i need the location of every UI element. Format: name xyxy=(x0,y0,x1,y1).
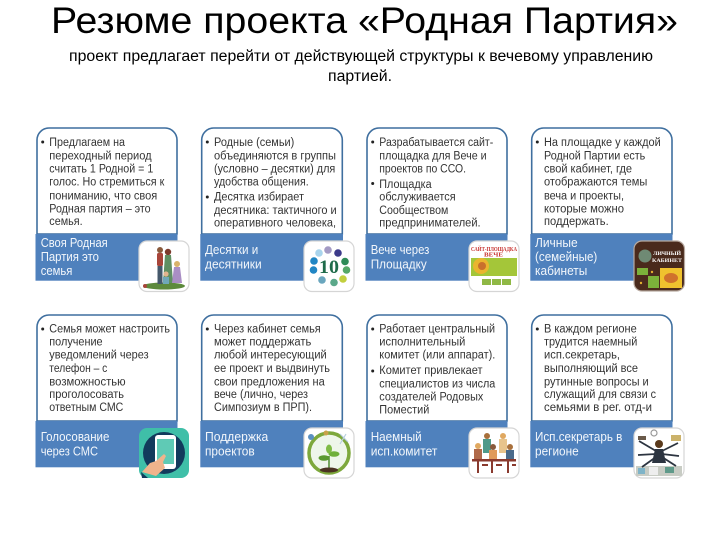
icon: team at table xyxy=(469,428,519,478)
text: card 1 body: пониманию, что своя xyxy=(49,190,157,202)
heading: card 5: через СМС xyxy=(41,444,98,458)
text: card 2 body: оперативного человека, xyxy=(214,218,336,230)
panel: Исп.секретарь в регионе xyxy=(530,315,684,478)
heading: card 8: регионе xyxy=(535,444,579,458)
text: card 5 body: ответным СМС xyxy=(49,402,123,414)
text: card 7 body: Работает центральный xyxy=(379,324,495,336)
text: card 1 body: Родная партия – это xyxy=(49,204,151,216)
text: card 1 body: Предлагаем на xyxy=(49,137,126,149)
text: card 6 body: свои предложения на xyxy=(214,376,325,388)
text: card 4 body xyxy=(544,137,661,228)
text: card 4 body: отображаются темы xyxy=(544,176,647,188)
text: card 1 body: переходный период xyxy=(49,150,152,162)
text: card 8 body: В каждом регионе xyxy=(544,324,637,336)
heading: card 4: Личные xyxy=(535,235,578,250)
text: card 5 body xyxy=(49,324,170,414)
text: card 1 body: семья. xyxy=(49,216,83,228)
text: card 8 body: семьями в рег. отд-и xyxy=(544,402,652,414)
panel: Своя Родная Партия xyxy=(36,128,189,292)
heading: card 8 xyxy=(535,429,622,458)
subtitle xyxy=(69,48,653,85)
text: card 4 body: На площадке у каждой xyxy=(544,137,661,149)
text: card 7 body: комитет (или аппарат). xyxy=(379,350,495,362)
text: card 3 body xyxy=(379,137,493,230)
text: card 3 body: проектов по ССО. xyxy=(379,164,466,176)
panel: Наемный исп.комитет xyxy=(366,315,519,478)
text: card 4 body: которые можно xyxy=(544,204,624,216)
heading: card 1: семья xyxy=(41,263,72,278)
panel: Поддержка проектов xyxy=(200,315,354,478)
heading: card 4 xyxy=(535,235,597,278)
icon: personal cabinet: КАБИНЕТ xyxy=(652,258,682,264)
text: card 1 body xyxy=(49,137,165,228)
subtitle: проект предлагает перейти от действующей структуры к вечевому управлению xyxy=(69,48,653,65)
heading: card 1: Партия это xyxy=(41,249,99,264)
icon: personal cabinet: ЛИЧНЫЙ xyxy=(653,249,682,257)
heading: card 7: исп.комитет xyxy=(371,444,437,458)
text: card 6 body xyxy=(214,324,330,414)
text: card 8 body: рутинные вопросы и xyxy=(544,376,649,388)
text: card 5 body: телефон – с xyxy=(49,363,108,375)
text: card 2 body: Родные (семьи) xyxy=(214,137,294,149)
text: card 2 body: (условно – десятки) для xyxy=(214,164,335,176)
text: card 2 body: удобства общения. xyxy=(214,176,309,188)
text: card 3 body: площадка для Вече и xyxy=(379,150,487,162)
icon: site: САЙТ-ПЛОЩАДКА xyxy=(471,245,517,253)
subtitle: партией. xyxy=(328,68,392,85)
text: card 6 body: может поддержать xyxy=(214,336,311,348)
icon: personal cabinet xyxy=(634,241,684,291)
title: Резюме проекта «Родная Партия» xyxy=(51,0,678,41)
text: card 8 body: выполняющий все xyxy=(544,363,638,375)
text: card 6 body: Через кабинет семья xyxy=(214,324,321,336)
heading: card 5 xyxy=(41,429,109,458)
text: card 5 body: возможностью xyxy=(49,376,126,388)
text: card 7 body xyxy=(379,324,496,416)
text: card 7 body: исполнительный xyxy=(379,336,465,348)
text: card 2 body: объединяются в группы xyxy=(214,150,336,162)
heading: card 7: Наемный xyxy=(371,429,422,444)
heading: card 4: (семейные) xyxy=(535,249,597,264)
heading: card 8: Исп.секретарь в xyxy=(535,429,622,444)
icon: family xyxy=(139,241,189,292)
heading: card 2: десятники xyxy=(205,257,262,272)
text: card 8 body: служащий для связи с xyxy=(544,389,656,401)
text: card 5 body: проголосовать xyxy=(49,389,124,401)
panel: Личные кабинеты xyxy=(530,128,684,291)
text: card 3 body: предпринимателей. xyxy=(379,218,481,230)
text: card 3 body: Разрабатывается сайт- xyxy=(379,137,493,149)
panel: Десятки и десятники xyxy=(200,128,354,292)
text: card 7 body: специалистов из числа xyxy=(379,378,496,390)
heading: card 3 xyxy=(371,242,429,272)
icon: site: ВЕЧЕ xyxy=(484,252,503,258)
text: card 4 body: Родной Партии есть xyxy=(544,150,645,162)
text: card 7 body: Комитет привлекает xyxy=(379,365,483,377)
text: card 6 body: вече (лично, через xyxy=(214,389,308,401)
heading: card 1: Своя Родная xyxy=(41,235,108,250)
icon: phone xyxy=(139,428,189,478)
panel: Голосование через СМС xyxy=(36,315,189,478)
heading: card 6: Поддержка xyxy=(205,429,269,444)
text: card 3 body: Сообществом xyxy=(379,205,448,217)
text: card 8 body: трудится наемный xyxy=(544,336,637,348)
icon: ten circles xyxy=(304,241,354,292)
heading: card 2 xyxy=(205,242,262,272)
text: card 2 body xyxy=(214,137,337,230)
heading: card 7 xyxy=(371,429,437,458)
heading: card 2: Десятки и xyxy=(205,242,258,257)
heading: card 6 xyxy=(205,429,269,458)
text: card 3 body: Площадка xyxy=(379,179,432,191)
text: card 2 body: десятника: тактичного и xyxy=(214,205,337,217)
text: card 4 body: веча и проекты, xyxy=(544,190,624,202)
text: card 3 body: обслуживается xyxy=(379,192,456,204)
text: card 1 body: голос. Но стремиться к xyxy=(49,176,165,188)
text: card 7 body: Поместий xyxy=(379,404,429,416)
text: card 7 body: создателей Родовых xyxy=(379,392,484,404)
heading: card 6: проектов xyxy=(205,444,255,458)
icon: site xyxy=(469,241,519,292)
text: card 8 body xyxy=(544,324,656,414)
text: card 5 body: получение xyxy=(49,336,103,348)
text: card 6 body: Симпозиум в ПРП). xyxy=(214,402,312,414)
icon: busy secretary xyxy=(634,428,684,478)
text: card 4 body: свой кабинет, где xyxy=(544,164,632,176)
heading: card 3: Площадку xyxy=(371,257,427,272)
text: card 2 body: Десятка избирает xyxy=(214,192,305,204)
text: card 8 body: исп.секретарь, xyxy=(544,350,620,362)
icon: ten circles: 10 xyxy=(319,257,339,278)
text: card 4 body: поддержать. xyxy=(544,216,609,228)
heading: card 5: Голосование xyxy=(41,429,109,444)
heading: card 3: Вече через xyxy=(371,242,429,257)
text: card 6 body: любой интересующий xyxy=(214,350,327,362)
text: card 1 body: считать 1 Родной = 1 xyxy=(49,164,153,176)
heading: card 4: кабинеты xyxy=(535,263,587,278)
icon: plant globe xyxy=(304,428,354,478)
heading: card 1 xyxy=(41,235,108,278)
text: card 5 body: Семья может настроить xyxy=(49,324,170,336)
text: card 5 body: уведомлений через xyxy=(49,350,149,362)
text: card 6 body: ее проект и выдвинуть xyxy=(214,363,330,375)
panel: Вече через Площадку xyxy=(366,128,519,292)
